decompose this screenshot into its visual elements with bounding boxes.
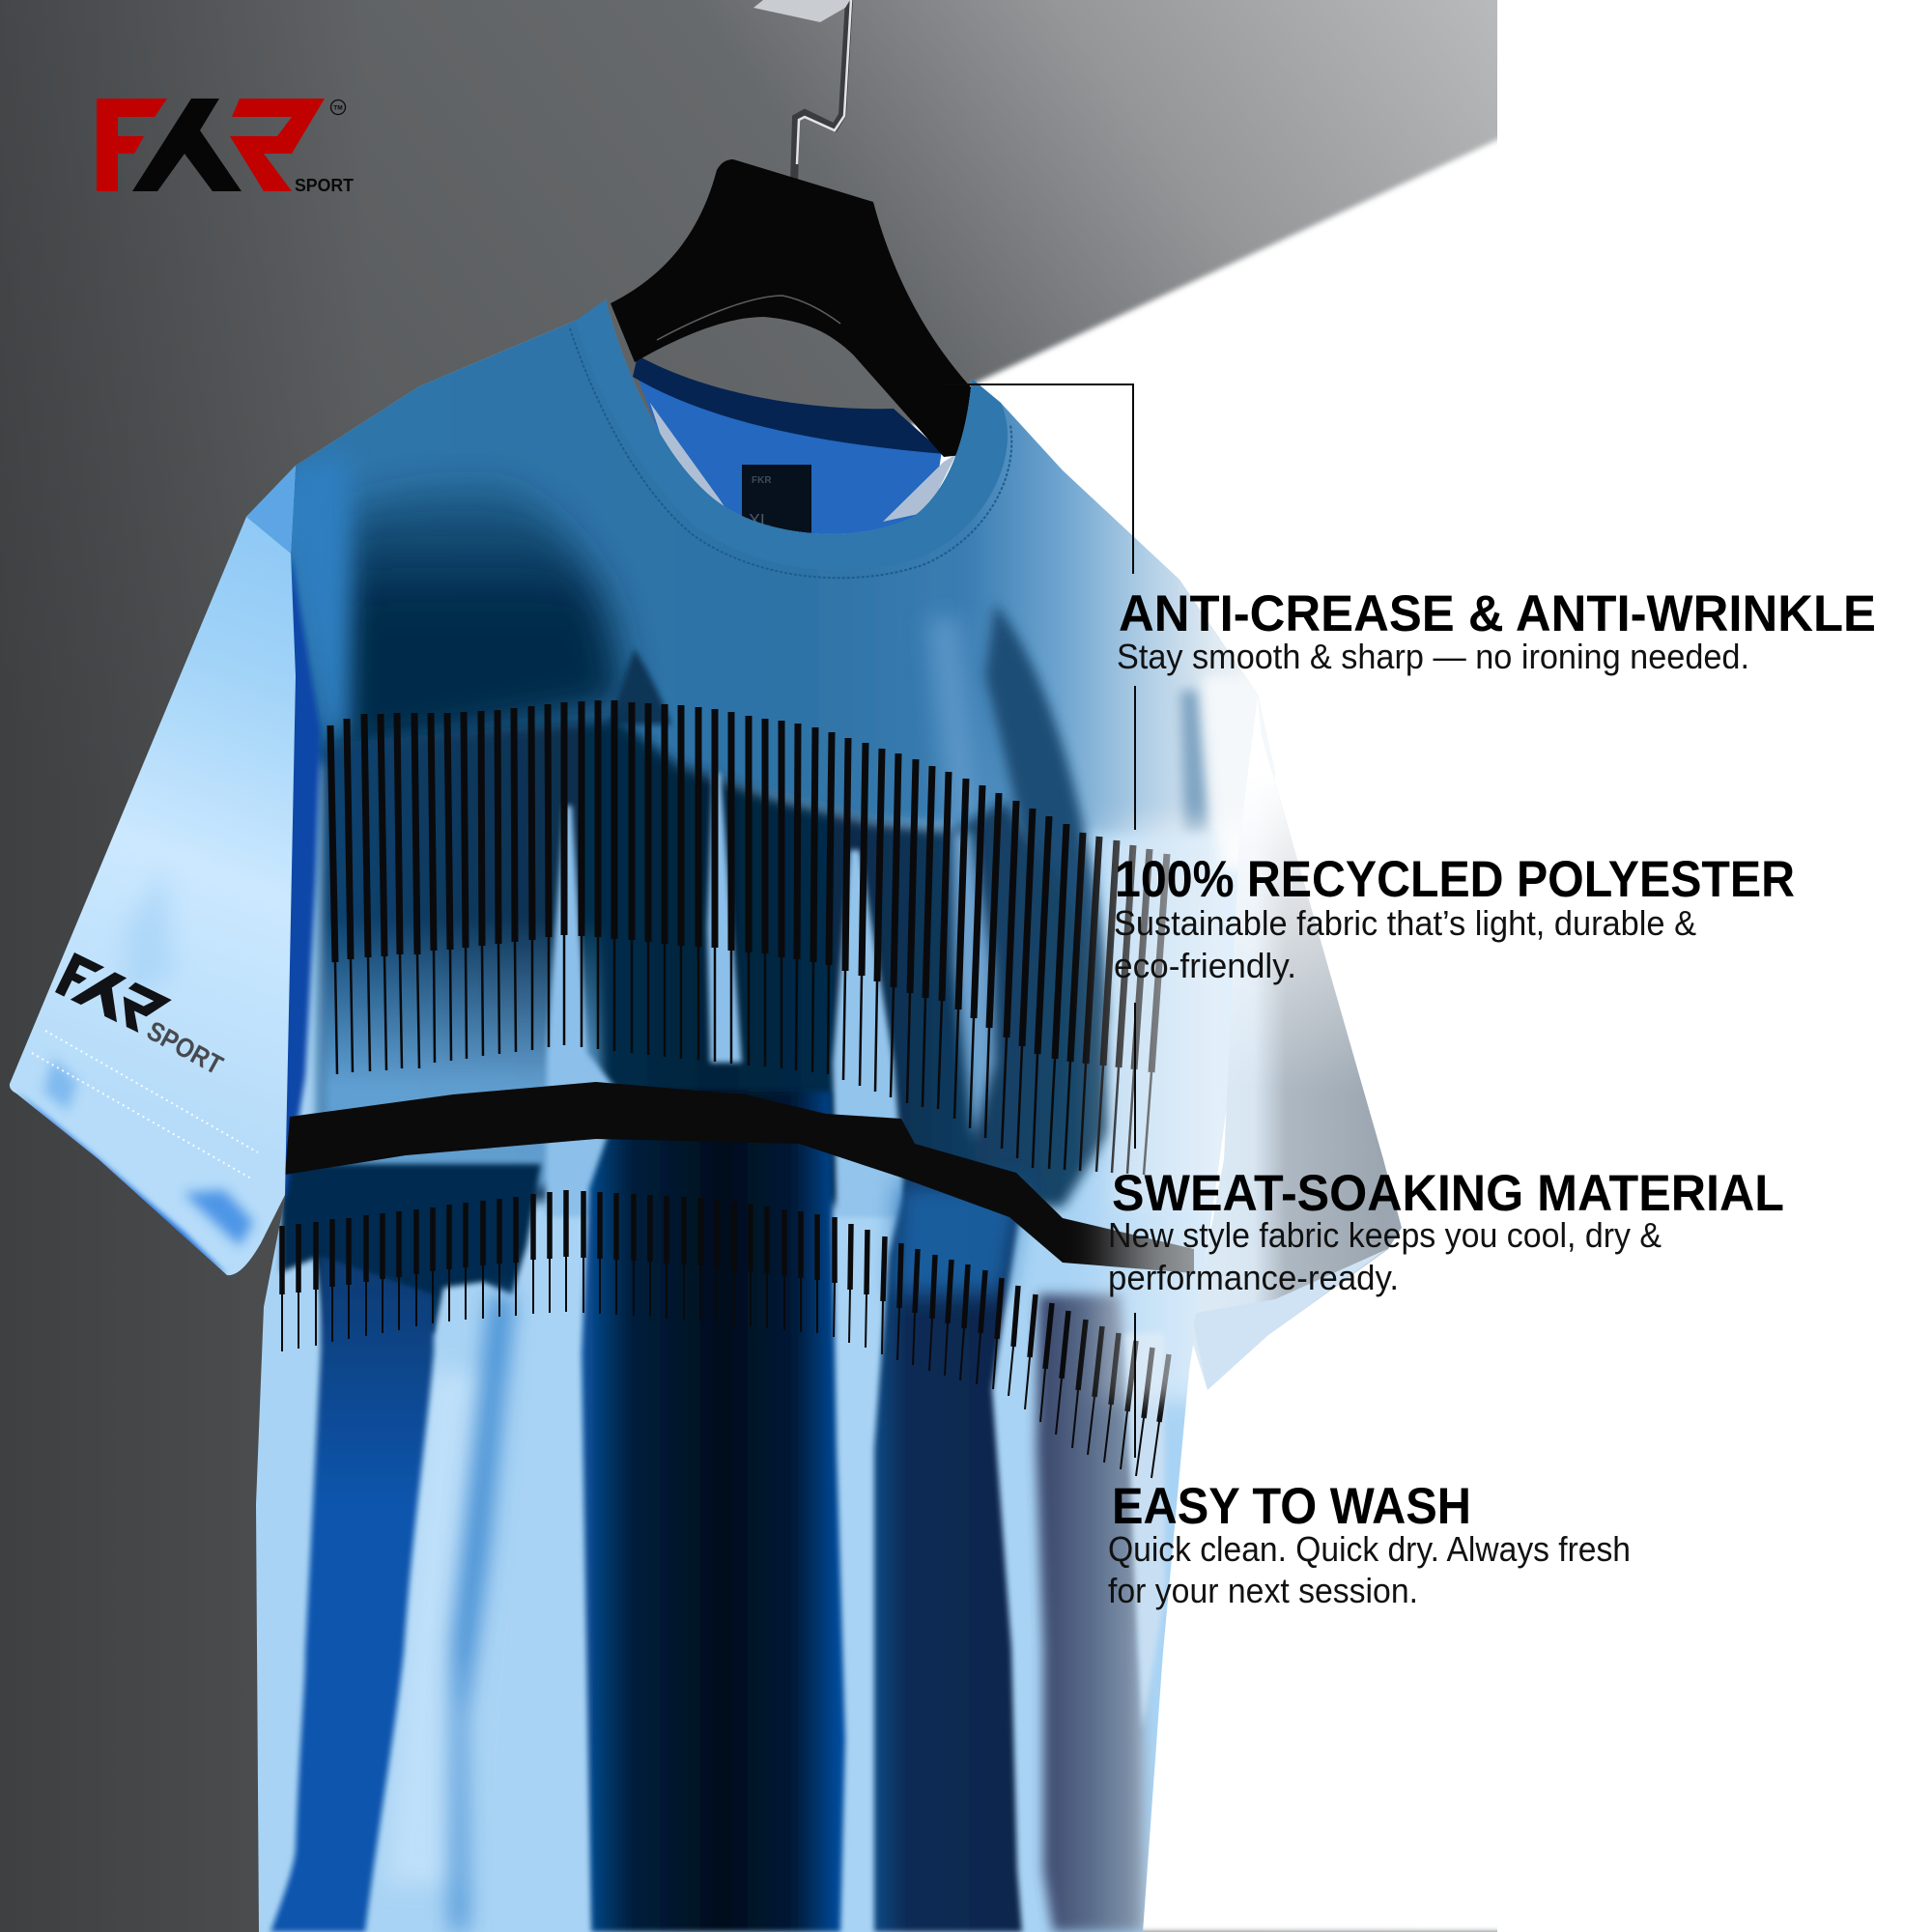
feature: recycled polyester [1114,851,1795,985]
armhole royal strip [285,558,323,1200]
right chest light area [1107,831,1227,1208]
inner neck label: FKR [752,475,772,486]
feature: sweat-soaking [1108,1165,1784,1297]
sleeve-cast shadow below band [281,1164,541,1333]
upper chest shading [269,299,1275,836]
leader line from collar [944,384,1135,1458]
feature: recycled polyester: Sustainable fabric that’s light, durable & [1114,903,1696,943]
sleeve logo [55,952,228,1080]
hanger [611,0,972,457]
lower right grey-blue shade [1037,1294,1150,1932]
hem stitching [32,1031,258,1179]
black chest band [285,1082,1194,1273]
fold shadow at shoulder [985,604,1111,1024]
right side overexposed fade [1083,808,1238,1417]
lower body shadow folds [270,1256,434,1932]
FKR SPORT logo: TM [333,104,343,112]
feature: sweat-soaking: New style fabric keeps you cool, dry & [1108,1215,1662,1255]
feature: anti-crease: Stay smooth & sharp — no ironing needed. [1117,637,1749,676]
FKR SPORT logo [97,99,354,195]
feature: sweat-soaking: performance-ready. [1108,1258,1399,1297]
shoulder bright panel [291,455,365,742]
feature: easy to wash: for your next session. [1108,1571,1418,1610]
sleeve logo: SPORT [142,1015,228,1080]
light streaks [546,806,618,1217]
right sleeve [1188,676,1410,1401]
print zone lower fade [321,918,601,1188]
feature: recycled polyester: eco-friendly. [1114,946,1296,985]
FKR SPORT logo: SPORT [295,176,354,195]
feature: recycled polyester: 100% RECYCLED POLYESTER [1115,851,1795,908]
collar rib [570,299,1011,578]
lower right light streak [1125,1333,1165,1729]
sleeve top blue tint [246,466,296,554]
feature: sweat-soaking: SWEAT-SOAKING MATERIAL [1112,1165,1784,1222]
feature: anti-crease: ANTI-CREASE & ANTI-WRINKLE [1119,585,1876,642]
feature: easy to wash: Quick clean. Quick dry. Always fresh [1108,1529,1631,1569]
inside back of shirt neck [633,355,956,541]
hanger hook [753,0,851,184]
dark print zone shading [319,720,1111,1208]
t-shirt body [242,280,1333,1932]
left sleeve [10,466,296,1275]
lower print: vertical stripes [282,1190,1169,1478]
inner neck label: XL [749,511,770,530]
feature: easy to wash: EASY TO WASH [1112,1478,1471,1535]
hem underside blue [16,1092,227,1275]
inner neck label [742,465,811,536]
feature: easy to wash [1108,1478,1631,1610]
shoulder shadow blob [328,484,626,763]
lower highlights [384,1368,486,1888]
upper print: vertical stripes [330,700,1167,1175]
central dark cone [609,649,671,724]
feature: anti-crease [1117,585,1876,676]
light streak right chest [923,612,986,833]
